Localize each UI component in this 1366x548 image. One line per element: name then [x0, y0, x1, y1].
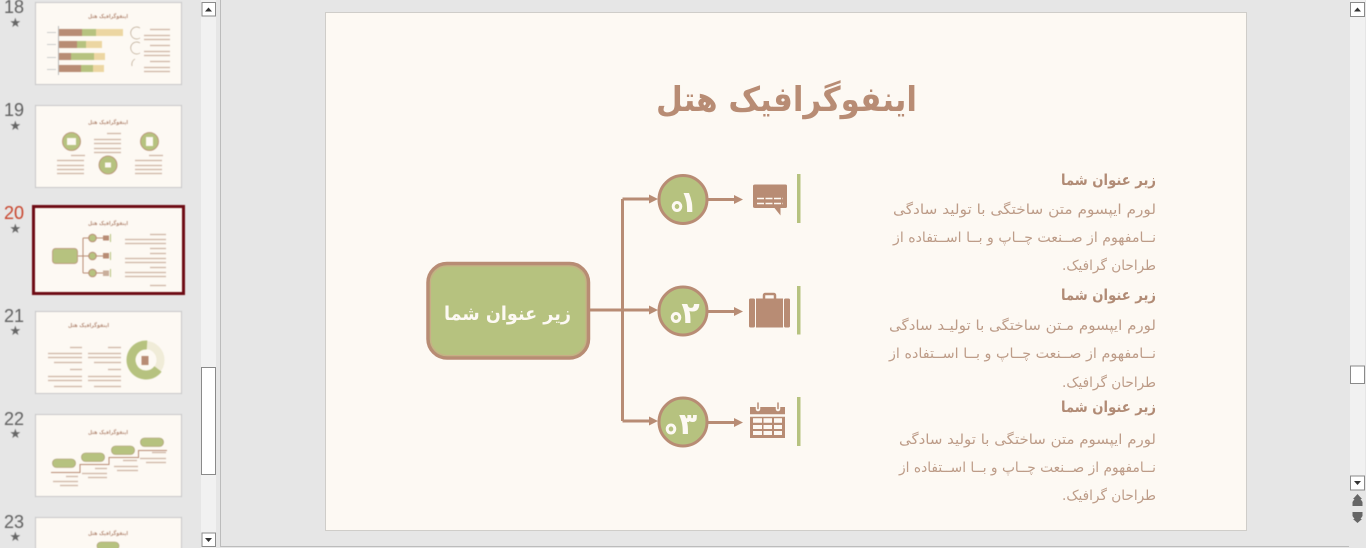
node 03: ۳: [679, 407, 697, 442]
scrollbar: slide view: [1350, 0, 1365, 523]
node 01: ۱: [679, 185, 698, 220]
text block 2: [888, 286, 1156, 391]
text block 2: طراحان گرافیک.: [1062, 374, 1156, 391]
text block 3: [898, 398, 1156, 504]
box label: زیر عنوان شما: [444, 303, 571, 325]
thumbnail 21: 21: [4, 306, 24, 326]
thumbnail 23: [4, 512, 182, 548]
text block 3: لورم ایپسوم متن ساختگی با تولید سادگی: [899, 431, 1156, 448]
thumbnail 18: [4, 0, 182, 84]
thumbnail 23: ★: [10, 530, 21, 545]
thumbnail 19: [4, 100, 182, 188]
thumbnail 19: اینفوگرافیک هتل: [88, 119, 128, 126]
node 02: [659, 287, 707, 336]
thumbnail 22: اینفوگرافیک هتل: [88, 429, 128, 436]
text block 1: [892, 171, 1156, 274]
connector lines and arrows: [590, 194, 743, 427]
text block 3: نــامفهوم از صــنعت چــاپ و بــا اســتفاده از: [898, 460, 1156, 476]
thumbnail 20 (selected): اینفوگرافیک هتل: [88, 220, 128, 227]
panel: slide thumbnail list: [0, 0, 200, 548]
thumbnail 21: ★: [10, 324, 21, 339]
text block 3: زیر عنوان شما: [1061, 398, 1156, 416]
node 03: ۰: [662, 412, 680, 447]
icon: previous slide: [1352, 494, 1362, 506]
icon: calendar: [750, 403, 785, 438]
thumbnail 23: اینفوگرافیک هتل: [88, 530, 128, 537]
node 03: [659, 398, 707, 447]
thumbnail 20 (selected): [4, 203, 184, 294]
text block 1: لورم ایپسوم متن ساختگی با تولید سادگی: [893, 201, 1156, 218]
thumbnail 21: اینفوگرافیک هتل: [68, 322, 109, 329]
scrollbar: thumbnail list: [201, 0, 216, 548]
text block 2: لورم ایپسوم مـتن ساختگی با تولیـد سادگی: [889, 317, 1156, 334]
node 01: ۰: [668, 190, 686, 225]
accent bars: [797, 174, 800, 446]
icon: next slide: [1352, 512, 1362, 523]
thumbnail 18: اینفوگرافیک هتل: [88, 13, 128, 20]
thumbnail 22: [4, 409, 182, 496]
panel: slide: [326, 12, 1246, 530]
node 02: ۲: [681, 296, 700, 331]
icon: suitcase: [749, 294, 790, 328]
text block 2: نــامفهوم از صــنعت چــاپ و بــا اســتفاده از: [888, 346, 1156, 362]
thumbnail 22: 22: [4, 409, 24, 429]
thumbnail 23: 23: [4, 512, 24, 532]
thumbnail 22: ★: [10, 427, 21, 442]
text block 2: زیر عنوان شما: [1061, 286, 1156, 304]
text block 1: نــامفهوم از صــنعت چــاپ و بــا اســتفاده از: [892, 230, 1156, 246]
thumbnail 20 (selected): 20: [4, 203, 24, 223]
text block 3: طراحان گرافیک.: [1062, 487, 1156, 504]
central box: [428, 264, 588, 358]
icon: speech bubble: [753, 184, 787, 216]
title: اینفوگرافیک هتل: [656, 80, 917, 120]
thumbnail 19: 19: [4, 100, 24, 120]
text block 1: زیر عنوان شما: [1061, 171, 1156, 189]
thumbnail 19: ★: [10, 119, 21, 134]
thumbnail 18: ★: [10, 16, 21, 31]
node 02: ۰: [667, 301, 685, 336]
thumbnail 20 (selected): ★: [10, 222, 21, 237]
text block 1: طراحان گرافیک.: [1062, 257, 1156, 274]
node 01: [659, 176, 707, 225]
thumbnail 21: [4, 306, 182, 394]
